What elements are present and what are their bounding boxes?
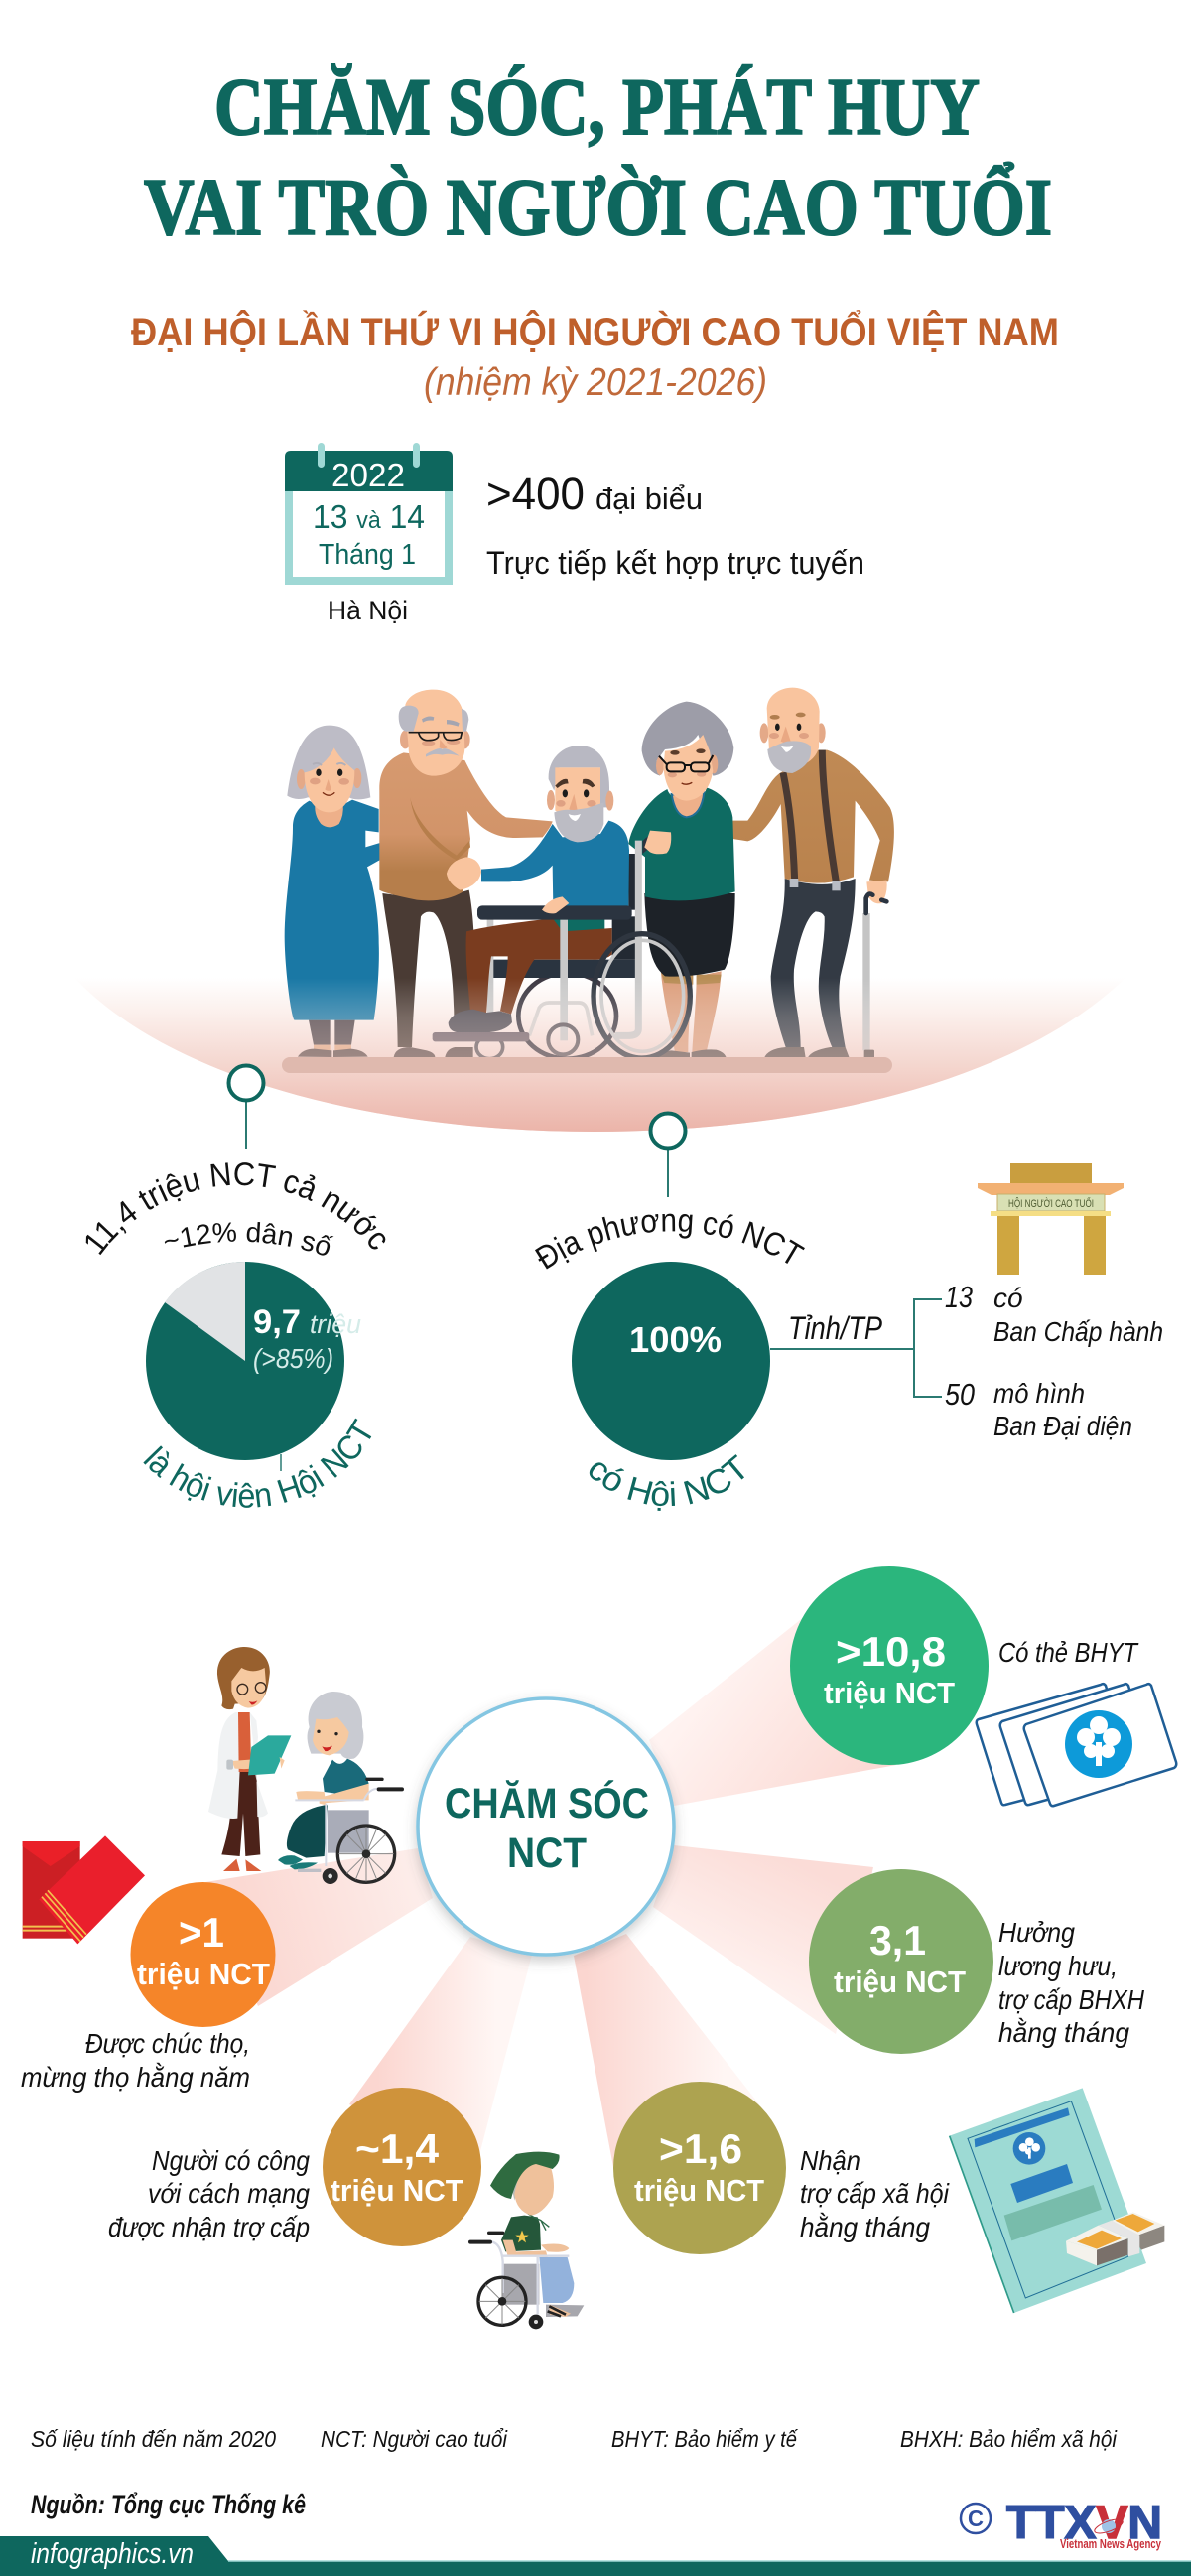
floor bar	[282, 1057, 892, 1073]
curved heading: national count: 11,4 triệu NCT cả nước	[85, 1162, 385, 1255]
hub: care for the elderly: CHĂM SÓC	[445, 1779, 649, 1828]
stat circle: pension: 3,1	[869, 1917, 926, 1964]
icon: calendar	[285, 443, 453, 581]
stat circle: health insurance: >10,8	[836, 1628, 946, 1675]
icon: association gate: HỘI NGƯỜI CAO TUỔI	[1008, 1197, 1094, 1210]
stat: 13 executive boards: có	[993, 1283, 1023, 1313]
footnotes: BHXH: Bảo hiểm xã hội	[900, 2426, 1118, 2452]
connector lines	[770, 1299, 942, 1397]
label: pension: lương hưu,	[998, 1951, 1118, 1981]
label: social allowance: trợ cấp xã hội	[800, 2178, 950, 2209]
hub: care for the elderly: NCT	[507, 1830, 587, 1877]
stat: 50 representative boards: 50	[945, 1377, 975, 1412]
icon: calendar: 2022	[331, 457, 405, 493]
label: revolutionary contributors: Người có công	[152, 2145, 310, 2176]
marker: membership pin	[228, 1066, 264, 1149]
person: man in wheelchair	[433, 746, 690, 1059]
icons: envelopes, doctor and patient	[23, 1647, 402, 1944]
curved label: association members: là hội viên Hội NCT	[143, 1418, 371, 1508]
logo: TTXVN: C	[968, 2506, 984, 2531]
label: longevity: mừng thọ hằng năm	[21, 2062, 250, 2093]
icon: calendar: 13 và 14	[313, 498, 425, 535]
delegates stat: đại biểu	[596, 481, 703, 516]
stat: 50 representative boards: mô hình	[993, 1378, 1085, 1409]
label: pension: Hưởng	[998, 1917, 1075, 1948]
label: social allowance: Nhận	[800, 2145, 860, 2176]
icon: banknote stacks	[1066, 2212, 1164, 2265]
label: revolutionary contributors: được nhận trợ cấp	[108, 2212, 310, 2242]
pie chart: members share: (>85%)	[253, 1343, 333, 1374]
person: tall man with glasses	[379, 690, 553, 1057]
member tick	[280, 1454, 282, 1471]
title: CHĂM SÓC, PHÁT HUY	[214, 62, 980, 152]
icon: allowance book and money	[950, 2088, 1164, 2313]
panel: localities	[535, 1112, 1163, 1511]
footnotes: NCT: Người cao tuổi	[321, 2426, 508, 2452]
stat circle: social allowance: triệu NCT	[634, 2173, 764, 2208]
stat circle: health insurance	[790, 1566, 989, 1765]
stat circle: revolutionary contributors: ~1,4	[355, 2125, 440, 2172]
pie chart: 100 percent: 100%	[629, 1319, 722, 1360]
subtitle: (nhiệm kỳ 2021-2026)	[424, 361, 767, 404]
person: woman with glasses in green	[628, 702, 735, 1058]
logo: TTXVN: TTXVN	[1006, 2496, 1162, 2548]
source: Nguồn: Tổng cục Thống kê	[31, 2490, 306, 2519]
label: longevity: Được chúc thọ,	[85, 2028, 250, 2059]
label: health insurance: Có thẻ BHYT	[998, 1637, 1139, 1668]
curved heading: localities: Địa phương có NCT	[535, 1213, 805, 1269]
stat circle: pension	[809, 1869, 993, 2054]
stat circle: revolutionary contributors: triệu NCT	[331, 2173, 463, 2208]
stat: 13 executive boards: Ban Chấp hành	[993, 1316, 1163, 1347]
pie chart: 100 percent	[572, 1262, 770, 1460]
illustration: five elderly people	[285, 688, 894, 1059]
title: VAI TRÒ NGƯỜI CAO TUỔI	[144, 161, 1052, 252]
stat circle: pension: triệu NCT	[834, 1965, 966, 1999]
pie chart: members share	[146, 1262, 361, 1460]
format text: Trực tiếp kết hợp trực tuyến	[486, 545, 864, 581]
figure: woman in wheelchair	[278, 1692, 402, 1884]
footer bar: infographics.vn	[31, 2538, 194, 2570]
curved label: has association: có Hội NCT	[590, 1454, 744, 1511]
person: bald man with suspenders and cane	[732, 688, 894, 1058]
label: revolutionary contributors	[108, 2145, 310, 2242]
footnotes: Số liệu tính đến năm 2020	[31, 2426, 276, 2452]
label: social allowance	[800, 2145, 950, 2242]
pink lens background	[74, 978, 1125, 1132]
marker: localities pin	[651, 1114, 685, 1197]
delegates stat: >400	[486, 469, 585, 519]
icon: red envelopes	[23, 1835, 145, 1944]
location label: Hà Nội	[328, 596, 408, 625]
label: pension	[998, 1917, 1145, 2048]
footer bar	[0, 2536, 1191, 2576]
label: social allowance: hằng tháng	[800, 2212, 930, 2242]
figure: doctor	[208, 1647, 291, 1871]
ground fade over illustration	[74, 978, 1125, 1132]
hub: care for the elderly	[418, 1698, 674, 1955]
icon: association gate	[978, 1163, 1124, 1275]
icon: calendar: Tháng 1	[319, 539, 416, 571]
subtitle	[131, 308, 1059, 404]
stat circle: longevity: >1	[179, 1909, 224, 1956]
footnotes: BHYT: Bảo hiểm y tế	[611, 2426, 799, 2452]
stat circle: social allowance	[613, 2082, 786, 2254]
label: longevity	[21, 2028, 250, 2093]
delegates stat	[486, 469, 703, 519]
stat: 13 executive boards	[945, 1280, 1163, 1347]
stat circle: health insurance: triệu NCT	[824, 1676, 955, 1710]
stat circle: revolutionary contributors	[323, 2088, 481, 2246]
footnotes	[31, 2426, 1118, 2452]
icon: veteran in wheelchair	[470, 2152, 584, 2329]
label: provinces: Tỉnh/TP	[788, 1310, 883, 1346]
rays from care hub	[205, 1616, 896, 2167]
label: pension: trợ cấp BHXH	[998, 1984, 1145, 2015]
label: revolutionary contributors: với cách mạng	[148, 2178, 310, 2209]
title	[144, 62, 1052, 252]
stat: 13 executive boards: 13	[945, 1280, 973, 1314]
pie chart: members share: triệu	[310, 1309, 361, 1339]
person: woman in blue dress	[285, 726, 420, 1057]
curved subheading: population share: ~12% dân số	[165, 1222, 333, 1256]
stat circle: social allowance: >1,6	[659, 2125, 742, 2172]
stat circle: longevity: triệu NCT	[137, 1957, 270, 1991]
pie chart: members share: 9,7	[253, 1303, 301, 1341]
stat circle: longevity	[131, 1882, 276, 2027]
label: pension: hằng tháng	[998, 2017, 1129, 2048]
stat: 50 representative boards: Ban Đại diện	[993, 1411, 1132, 1441]
stat: 50 representative boards	[945, 1377, 1132, 1441]
subtitle: ĐẠI HỘI LẦN THỨ VI HỘI NGƯỜI CAO TUỔI VIỆT NAM	[131, 308, 1059, 354]
panel: membership	[85, 1064, 385, 1508]
icon: insurance cards	[977, 1684, 1176, 1806]
